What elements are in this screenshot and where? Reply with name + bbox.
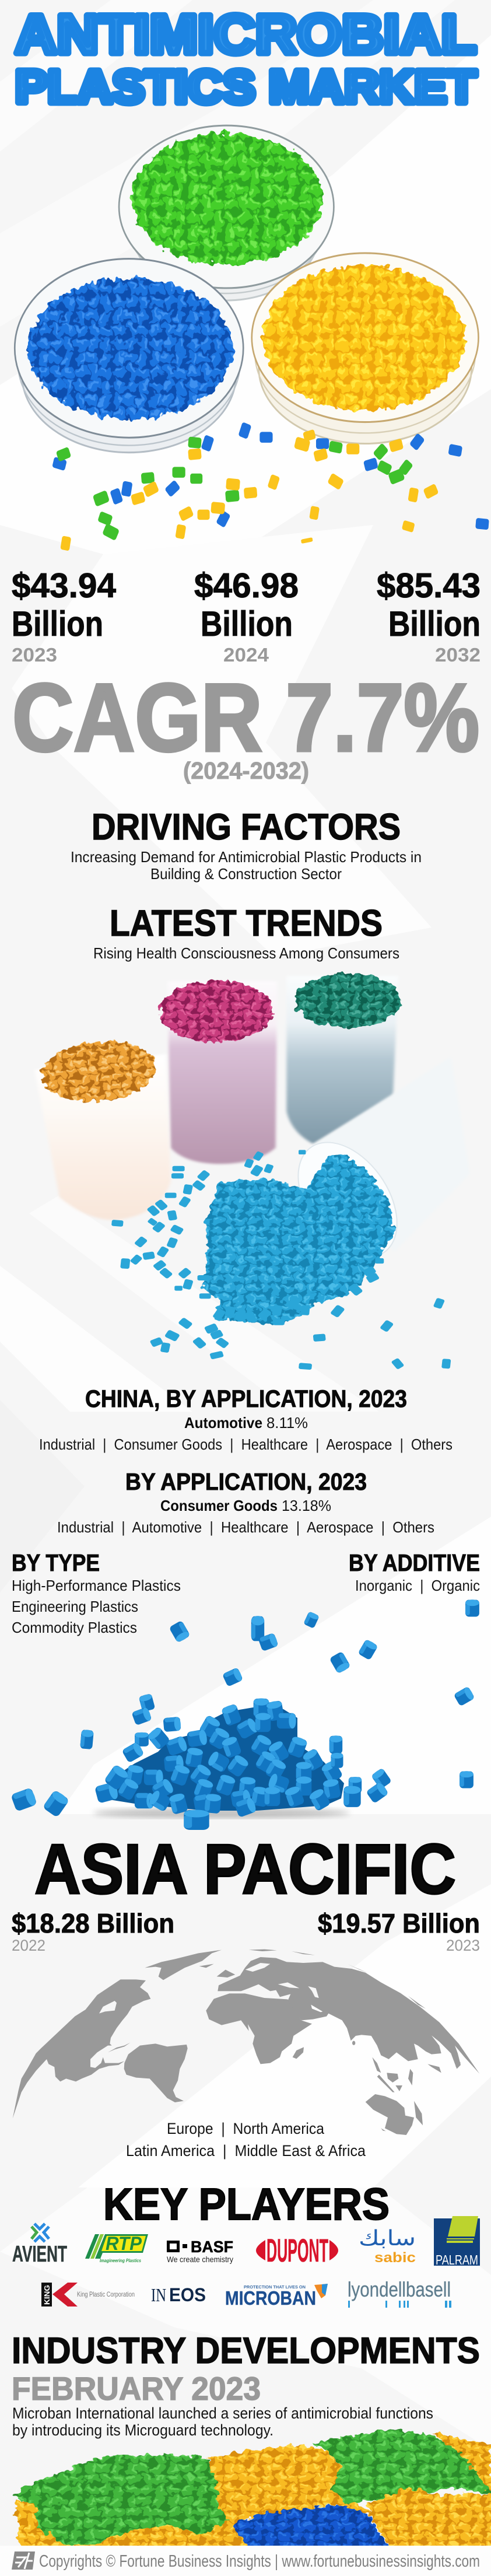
stat: Asia Pacific 2022 [12, 1908, 174, 1954]
type list: Engineering Plastics [12, 1598, 138, 1615]
heading: by application: BY APPLICATION, 2023 [125, 1468, 367, 1495]
pile mass [102, 1706, 344, 1811]
green right pellets [313, 2429, 491, 2505]
logo: DuPont [256, 2232, 338, 2269]
China leading segment [184, 1414, 308, 1432]
logo: RTP: Imagineering Plastics [100, 2258, 141, 2263]
sri lanka [352, 2041, 355, 2045]
tipped cup [278, 1057, 470, 1270]
photo: jars of coloured pellets with spilled blue pellets [34, 974, 469, 1370]
greenland [145, 1950, 222, 1980]
yellow top right pellets [432, 2432, 491, 2500]
logo: Avient: AVIENT [12, 2242, 67, 2267]
logo: Palram [434, 2216, 480, 2267]
heading: latest trends: LATEST TRENDS [110, 903, 383, 944]
logo: BASF: BASF [191, 2238, 233, 2256]
heading: by type: BY TYPE [12, 1549, 100, 1576]
loose yellow pellets [60, 429, 439, 551]
australia [366, 2094, 414, 2135]
other regions list: Europe | North America [167, 2120, 325, 2137]
stat: Asia Pacific 2023: $19.57 Billion [318, 1908, 480, 1938]
additive list: Inorganic | Organic [355, 1577, 480, 1594]
scattered pellets [111, 1150, 451, 1370]
logo: LyondellBasell [348, 2277, 451, 2308]
stat: 2032 market size [377, 566, 481, 666]
front pellet [184, 1810, 209, 1830]
logo: King Plastic [41, 2283, 135, 2306]
yellow middle pellets [208, 2445, 370, 2525]
spilled pellet pile [201, 1156, 396, 1325]
logo: INEOS [151, 2284, 206, 2305]
green left pellets [12, 2454, 232, 2544]
stat: 2024 market size: 2024 [223, 644, 269, 666]
China leading segment: 8.11% [266, 1414, 308, 1432]
photo: three glass bowls of plastic pellets [15, 125, 489, 551]
other regions list [126, 2120, 366, 2160]
latest trends text: Rising Health Consciousness Among Consumers [93, 944, 399, 962]
north america [13, 1979, 150, 2119]
stat: 2023 market size: 2023 [12, 644, 57, 666]
China segment list: Industrial | Consumer Goods | Healthcare | Aerospace | Others [39, 1436, 453, 1453]
blue pellets [232, 2505, 391, 2549]
logo: Avient [12, 2224, 67, 2267]
global segment list: Industrial | Automotive | Healthcare | Aerospace | Others [57, 1518, 434, 1536]
logo: LyondellBasell: lyondellbasell [348, 2277, 451, 2301]
loose blue pellets [52, 422, 489, 530]
China leading segment: Automotive [184, 1414, 262, 1432]
yellow bottom left pellets [16, 2492, 254, 2549]
driving factors text: Building & Construction Sector [150, 865, 342, 883]
footer [0, 2546, 491, 2576]
logo: SABIC: sabic [374, 2250, 416, 2266]
other regions list: Latin America | Middle East & Africa [126, 2142, 366, 2160]
icon: Fortune Business Insights logo [12, 2552, 35, 2570]
southeast asia islands [372, 2053, 461, 2125]
driving factors text [71, 848, 422, 883]
heading: Asia Pacific: ASIA PACIFIC [34, 1829, 456, 1909]
photo: mixed pellets banner [12, 2429, 491, 2549]
teal jar [286, 974, 401, 1144]
stat: Asia Pacific 2023: 2023 [446, 1937, 480, 1954]
global leading segment: Consumer Goods [160, 1497, 278, 1514]
stat: 2024 market size: Billion [201, 604, 293, 643]
uk and iceland [199, 1964, 235, 1978]
logo: SABIC: سابك [359, 2226, 416, 2250]
logo: BASF [167, 2238, 233, 2264]
blue bowl [15, 259, 243, 453]
logo: RTP: RTP [106, 2233, 142, 2254]
development text: Microban International launched a series of antimicrobial functions [12, 2404, 433, 2422]
stat: Asia Pacific 2022: $18.28 Billion [12, 1908, 174, 1938]
falling pellets [10, 1600, 479, 1818]
logo: DuPont: DUPONT [266, 2232, 328, 2269]
stat: 2023 market size [12, 566, 116, 666]
heading: driving factors: DRIVING FACTORS [92, 807, 401, 848]
type list [12, 1577, 181, 1636]
CAGR period: (2024-2032) [183, 757, 309, 784]
stat: 2023 market size: Billion [12, 604, 103, 643]
logo: SABIC [359, 2226, 416, 2266]
madagascar [293, 2047, 304, 2059]
loose green pellets [56, 436, 413, 541]
logo: King Plastic: King Plastic Corporation [77, 2290, 135, 2298]
stat: Asia Pacific 2022: 2022 [12, 1937, 45, 1954]
logo: King Plastic: KING [43, 2285, 51, 2305]
cuba [108, 2043, 130, 2052]
logo: RTP [85, 2233, 148, 2263]
pile shadow [93, 1808, 350, 1818]
title [15, 4, 476, 113]
south america [124, 2043, 188, 2102]
stat: Asia Pacific 2023 [318, 1908, 480, 1954]
pile pellets [117, 1698, 343, 1818]
logo: Palram: PALRAM [436, 2252, 478, 2267]
arctic islands [249, 1950, 426, 2008]
date: FEBRUARY 2023 [12, 2370, 261, 2407]
logo: BASF: We create chemistry [167, 2255, 233, 2264]
icon: Avient mark [31, 2224, 49, 2242]
yellow bowl [252, 253, 479, 444]
stat: 2023 market size: $43.94 [12, 566, 116, 605]
stat: 2032 market size: 2032 [435, 644, 481, 666]
photo: pile of blue cylindrical pellets [10, 1600, 479, 1830]
stat: 2032 market size: $85.43 [377, 566, 481, 605]
green bowl [119, 125, 334, 300]
eurasia [218, 1957, 479, 2074]
stat: 2024 market size [194, 566, 299, 666]
driving factors text: Increasing Demand for Antimicrobial Plastic Products in [71, 848, 422, 866]
stat: 2024 market size: $46.98 [194, 566, 299, 605]
pink jar [160, 981, 277, 1164]
world map [13, 1950, 479, 2135]
title: ANTIMICROBIAL [15, 4, 476, 65]
yellow right pellets [366, 2487, 491, 2549]
logo: Microban: MICROBAN [225, 2287, 316, 2309]
heading: key players: KEY PLAYERS [103, 2179, 390, 2230]
development text [12, 2404, 433, 2439]
orange jar [34, 1035, 171, 1220]
global leading segment: 13.18% [282, 1497, 331, 1514]
logo: INEOS: EOS [169, 2284, 206, 2305]
africa [206, 1993, 312, 2064]
logo: INEOS: IN [151, 2284, 166, 2305]
development text: by introducing its Microguard technology. [12, 2421, 273, 2439]
logo: Microban: PROTECTION THAT LIVES ON [244, 2286, 306, 2290]
type list: Commodity Plastics [12, 1619, 137, 1636]
type list: High-Performance Plastics [12, 1577, 181, 1594]
heading: China by application: CHINA, BY APPLICATION, 2023 [85, 1385, 407, 1412]
tasmania [381, 2128, 386, 2131]
title: PLASTICS MARKET [15, 61, 476, 113]
